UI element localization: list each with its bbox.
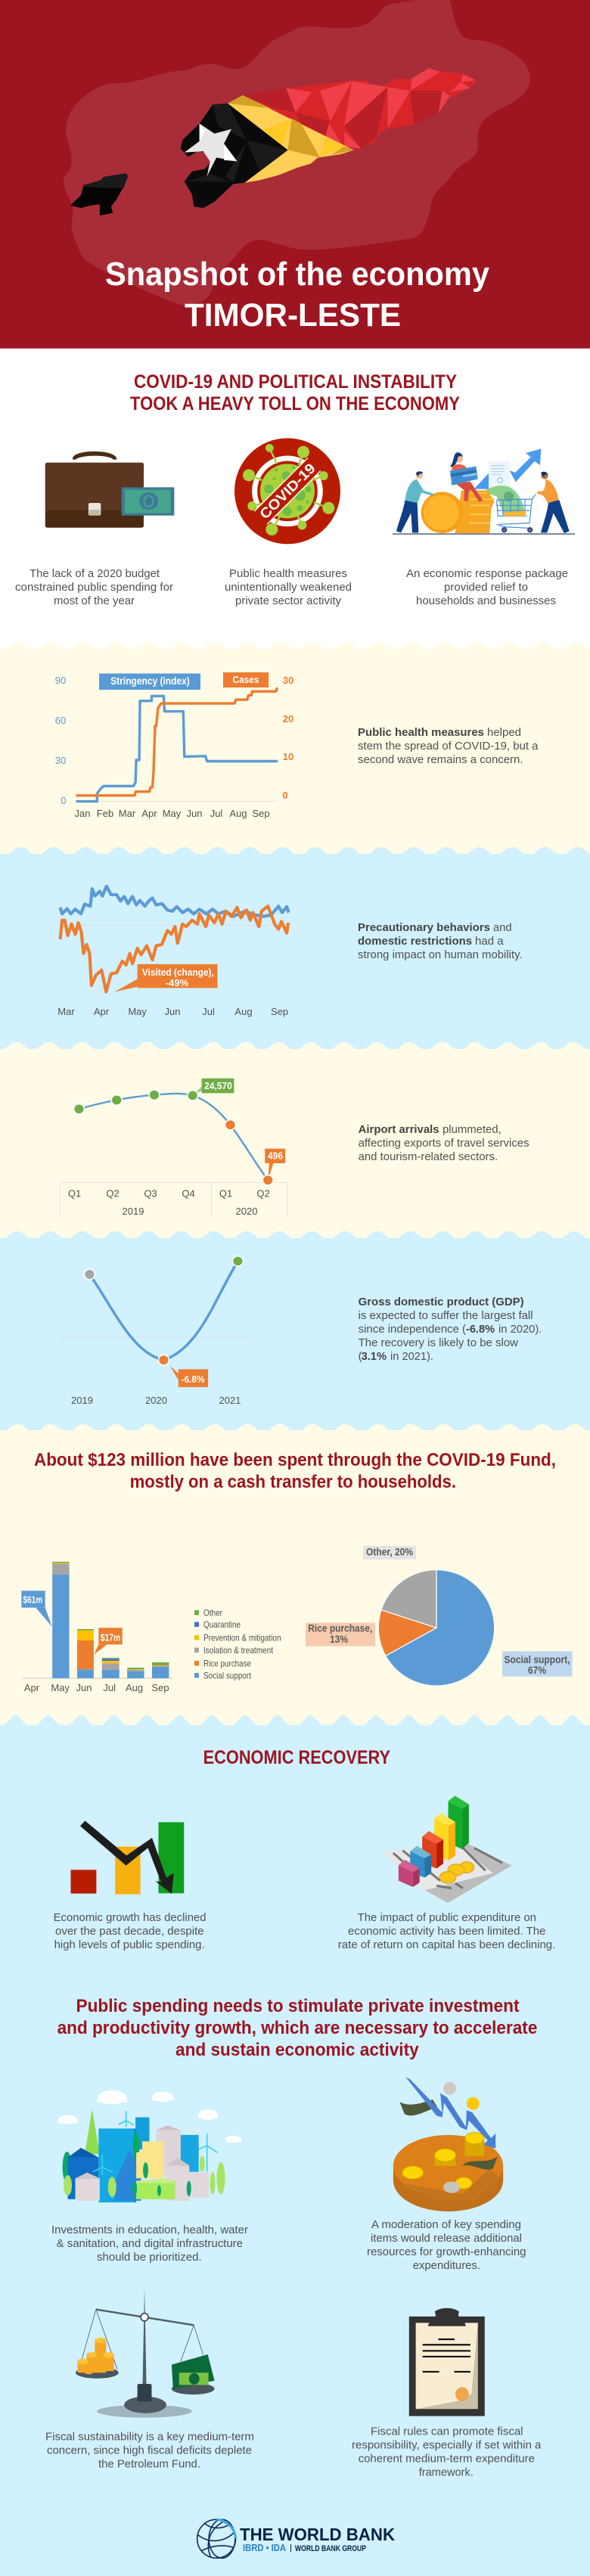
months: Jul	[210, 808, 222, 819]
heading: covid fund: mostly on a cash transfer to households.	[130, 1472, 456, 1492]
text: gdp: 3.1%	[362, 1350, 387, 1363]
axis labels: 2019	[123, 1206, 144, 1217]
callout: visited	[142, 967, 214, 989]
label: other: Other, 20%	[366, 1546, 413, 1558]
callouts: $17m	[101, 1632, 120, 1643]
months: Aug	[229, 808, 247, 819]
heading: covid fund	[34, 1450, 556, 1492]
icon: coins and falling arrow	[393, 2077, 503, 2211]
axis labels: 2020	[236, 1206, 257, 1217]
months: May	[51, 1682, 70, 1693]
right axis: 30	[283, 675, 293, 686]
label: cases: Cases	[233, 674, 259, 685]
text: moderation: expenditures.	[413, 2259, 480, 2272]
months	[57, 1006, 288, 1017]
text: public expenditure impact: The impact of public expenditure on	[358, 1911, 536, 1924]
text: gdp: -6.8%	[466, 1323, 495, 1336]
label: social: 67%	[528, 1664, 546, 1676]
text: gdp: since independence (	[359, 1323, 466, 1336]
year labels: 2021	[219, 1395, 241, 1406]
text: fiscal sustainability: the Petroleum Fund.	[98, 2458, 200, 2470]
text: public health measures: second wave remains a concern.	[358, 753, 523, 766]
icon: covid-19	[234, 438, 340, 544]
left axis: 90	[55, 675, 66, 686]
year labels	[71, 1395, 241, 1406]
heading: covid toll: TOOK A HEAVY TOLL ON THE ECONOMY	[130, 393, 460, 414]
text: investments: Investments in education, health, water	[51, 2224, 248, 2236]
logo: world bank: IBRD • IDA	[243, 2542, 287, 2553]
chart: stringency and cases	[55, 672, 293, 819]
text: investments: & sanitation, and digital infrastructure	[57, 2237, 243, 2250]
label: stringency: Stringency (index)	[110, 675, 190, 687]
months: Jul	[202, 1006, 215, 1017]
text: gdp	[359, 1296, 542, 1363]
text: economic growth	[54, 1911, 206, 1951]
right axis	[282, 675, 293, 801]
icon: covid-19: COVID-19	[256, 460, 318, 522]
value labels: 496	[268, 1151, 283, 1162]
text: gdp: in 2020).	[498, 1323, 542, 1336]
legend: Rice purchase	[203, 1658, 251, 1668]
bar: Jul	[102, 1658, 120, 1678]
logo: world bank: THE WORLD BANK	[240, 2525, 395, 2544]
text: economic growth: high levels of public spending.	[54, 1938, 205, 1951]
axis labels: Q1	[68, 1187, 81, 1200]
axis labels: Q2	[106, 1187, 120, 1200]
heading: covid toll	[130, 371, 460, 414]
map backdrop	[64, 0, 530, 306]
icon: Timor-Leste flag map	[70, 68, 476, 216]
heading: covid toll: COVID-19 AND POLITICAL INSTABILITY	[134, 371, 457, 393]
title	[105, 256, 489, 334]
months: Jun	[187, 808, 202, 819]
text: budget	[15, 567, 173, 607]
text: precautionary behaviors: and	[493, 921, 512, 934]
text: public health: private sector activity	[235, 594, 341, 607]
callouts: $61m	[23, 1594, 42, 1605]
right axis: 10	[283, 751, 293, 762]
text: public expenditure impact: rate of return on capital has been declining.	[338, 1938, 555, 1951]
months: Mar	[57, 1006, 75, 1017]
text: budget: most of the year	[54, 594, 135, 607]
text: economic response: households and businesses	[416, 594, 556, 607]
months	[75, 808, 270, 819]
text: economic growth: Economic growth has declined	[54, 1911, 206, 1924]
axis labels	[68, 1187, 270, 1217]
label: rice: Rice purchase,	[308, 1622, 372, 1634]
text: public health: unintentionally weakened	[225, 581, 352, 594]
callout: -6.8%: -6.8%	[182, 1374, 204, 1385]
legend: Isolation & treatment	[203, 1645, 274, 1656]
icon: globe	[197, 2519, 235, 2558]
months: Mar	[119, 808, 136, 819]
months: Apr	[141, 808, 157, 819]
text: gdp: Gross domestic product (GDP)	[359, 1296, 524, 1308]
text: precautionary behaviors: Precautionary behaviors	[358, 921, 490, 934]
left axis	[55, 675, 67, 806]
heading: public spending: and productivity growth, which are necessary to accelerate	[57, 2018, 537, 2038]
text: airport arrivals: plummeted,	[442, 1123, 502, 1136]
text: airport arrivals	[359, 1123, 529, 1163]
axis labels: Q1	[219, 1187, 232, 1200]
text: public expenditure impact: economic activity has been limited. The	[348, 1925, 545, 1938]
bar: May	[52, 1562, 70, 1678]
chart: gdp growth	[61, 1256, 250, 1406]
text: fiscal sustainability: concern, since high fiscal deficits deplete	[47, 2444, 252, 2457]
label: rice: 13%	[330, 1633, 348, 1645]
text: fiscal rules: coherent medium-term expenditure	[359, 2452, 535, 2466]
legend: Social support	[203, 1670, 252, 1681]
text: investments: should be prioritized.	[97, 2251, 202, 2264]
bar: Jun	[77, 1629, 94, 1678]
months: Sep	[151, 1682, 169, 1693]
right axis: 0	[282, 790, 288, 801]
right axis: 20	[283, 713, 293, 725]
axis labels: Q4	[182, 1187, 195, 1200]
callout: visited: -49%	[166, 977, 189, 989]
months: Sep	[271, 1006, 288, 1017]
panel: hero	[0, 0, 590, 349]
heading: public spending: and sustain economic activity	[175, 2040, 419, 2060]
text: economic growth: over the past decade, despite	[55, 1925, 204, 1938]
text: fiscal rules	[352, 2425, 542, 2479]
chart: spending pie	[306, 1546, 572, 1686]
label: cases	[223, 672, 269, 687]
text: precautionary behaviors: domestic restrictions	[358, 935, 472, 948]
text: fiscal rules: framework.	[419, 2466, 474, 2479]
text: fiscal rules: responsibility, especially if set within a	[352, 2438, 542, 2452]
months: Sep	[252, 808, 270, 819]
heading: economic recovery: ECONOMIC RECOVERY	[203, 1747, 390, 1768]
title: Snapshot of the economy	[105, 256, 489, 293]
months: Jan	[75, 808, 90, 819]
text: airport arrivals: Airport arrivals	[359, 1123, 439, 1136]
icon: clipboard	[409, 2308, 485, 2416]
year labels: 2019	[71, 1395, 93, 1406]
text: public health	[225, 567, 352, 607]
left axis: 0	[61, 795, 67, 806]
text: public health measures: Public health measures	[358, 726, 484, 739]
logo: world bank: WORLD BANK GROUP	[295, 2544, 366, 2553]
text: moderation: resources for growth-enhancing	[367, 2245, 526, 2258]
text: economic response	[406, 567, 568, 607]
text: economic response: An economic response package	[406, 567, 568, 580]
legend: Quarantine	[203, 1619, 241, 1630]
text: airport arrivals: and tourism-related sectors.	[359, 1150, 498, 1163]
text: public health measures	[358, 726, 539, 766]
months: Apr	[24, 1682, 40, 1693]
axis labels: Q3	[144, 1187, 157, 1200]
icon: 3d bars with documents	[382, 1795, 512, 1903]
left axis: 30	[55, 755, 66, 766]
text: public health measures: stem the spread of COVID-19, but a	[358, 740, 539, 753]
value labels	[204, 1081, 283, 1162]
text: gdp: (	[359, 1350, 362, 1363]
chart: monthly spending bars	[21, 1562, 173, 1693]
chart: human mobility	[57, 886, 289, 1017]
icon: declining bars	[71, 1820, 184, 1895]
icon: city	[58, 2090, 241, 2202]
text: fiscal rules: Fiscal rules can promote fiscal	[371, 2425, 523, 2438]
text: moderation: A moderation of key spending	[371, 2218, 521, 2231]
months: Apr	[94, 1006, 110, 1017]
icon: balance scale	[76, 2288, 215, 2418]
text: precautionary behaviors: strong impact on human mobility.	[358, 948, 523, 961]
text: precautionary behaviors	[358, 921, 523, 961]
text: airport arrivals: affecting exports of travel services	[359, 1137, 529, 1150]
label: social	[502, 1651, 572, 1677]
callout: visited: Visited (change),	[142, 967, 214, 978]
heading: covid fund: About $123 million have been spent through the COVID-19 Fund,	[34, 1450, 556, 1470]
icon: economic response people	[393, 448, 575, 535]
chart: airport arrivals	[61, 1079, 287, 1218]
label: rice	[306, 1622, 375, 1646]
bar: Sep	[152, 1662, 169, 1678]
heading: public spending: Public spending needs to stimulate private investment	[76, 1996, 520, 2016]
months: Aug	[126, 1682, 143, 1693]
text: gdp: The recovery is likely to be slow	[359, 1336, 518, 1349]
text: budget: The lack of a 2020 budget	[30, 567, 160, 580]
left axis: 60	[55, 715, 66, 726]
months: Jul	[103, 1682, 116, 1693]
months: Jun	[76, 1682, 92, 1693]
label: social: Social support,	[504, 1653, 570, 1665]
year labels: 2020	[145, 1395, 167, 1406]
legend	[194, 1608, 281, 1681]
months	[24, 1682, 169, 1693]
icon: briefcase with money	[45, 452, 174, 528]
bar: Aug	[127, 1668, 144, 1678]
title: TIMOR-LESTE	[185, 297, 401, 334]
text: public health: Public health measures	[229, 567, 347, 580]
months: May	[163, 808, 182, 819]
months: May	[128, 1006, 147, 1017]
legend: Prevention & mitigation	[203, 1632, 281, 1643]
text: economic response: provided relief to	[444, 581, 528, 594]
legend: Other	[203, 1608, 222, 1619]
months: Jun	[165, 1006, 180, 1017]
heading: public spending	[57, 1996, 537, 2060]
axis labels: Q2	[256, 1187, 270, 1200]
months: Aug	[234, 1006, 253, 1017]
text: public health measures: helped	[487, 726, 521, 739]
text: moderation	[367, 2218, 526, 2272]
callouts	[23, 1594, 120, 1643]
text: gdp: in 2021).	[390, 1350, 433, 1363]
text: precautionary behaviors: had a	[475, 935, 504, 948]
label: stringency	[99, 673, 200, 690]
text: budget: constrained public spending for	[15, 581, 173, 594]
logo: world bank	[197, 2519, 395, 2558]
text: fiscal sustainability	[45, 2431, 254, 2470]
text: public expenditure impact	[338, 1911, 555, 1951]
text: moderation: items would release additional	[371, 2232, 522, 2245]
text: investments	[51, 2224, 248, 2264]
text: fiscal sustainability: Fiscal sustainability is a key medium-term	[45, 2431, 254, 2443]
months: Feb	[97, 808, 113, 819]
text: gdp: is expected to suffer the largest fall	[359, 1309, 533, 1322]
value labels: 24,570	[204, 1081, 232, 1091]
